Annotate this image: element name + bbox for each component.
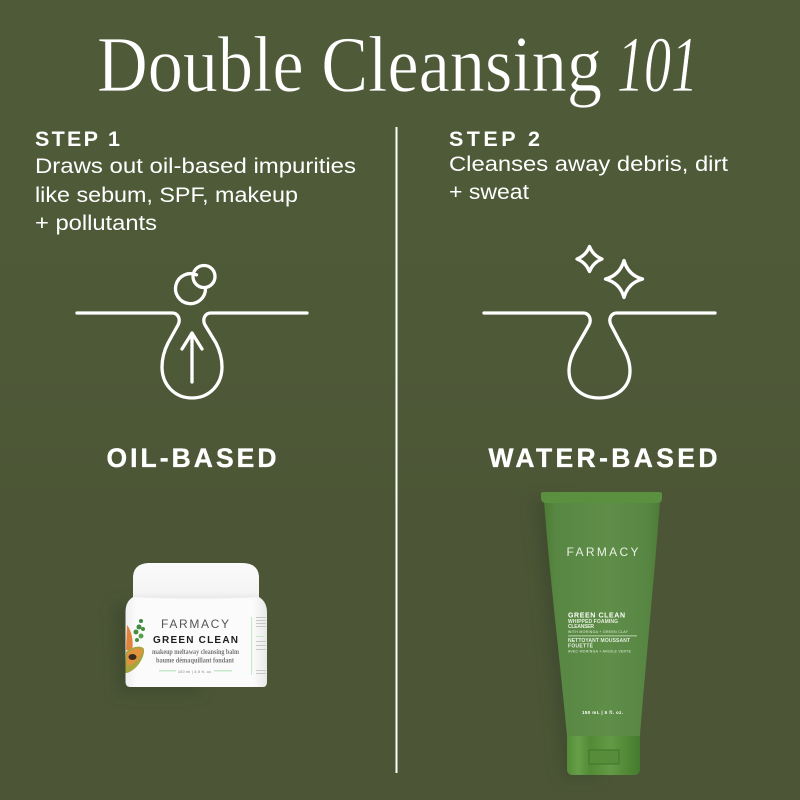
- icon: pore with oil bubbles and up arrow: [77, 266, 307, 398]
- tube cap: [567, 736, 640, 775]
- jar label text: FARMACY: [161, 617, 229, 631]
- panel: step 2 text: + sweat: [449, 180, 529, 204]
- product: whipped foaming cleanser tube: GREEN CLEAN: [568, 612, 625, 620]
- product: cleansing balm jar: [114, 563, 267, 694]
- product: whipped foaming cleanser tube: NETTOYANT MOUSSANT: [568, 638, 630, 644]
- product: cleansing balm jar: baume démaquillant fondant: [156, 656, 234, 664]
- title: 101: [617, 22, 698, 109]
- panel: step 2 text: Cleanses away debris, dirt: [449, 152, 728, 176]
- jar body: [126, 597, 267, 687]
- panel: step 1 text: + pollutants: [35, 211, 157, 235]
- panel: step 1 text: STEP 1: [35, 127, 120, 151]
- heading: water-based: WATER-BASED: [488, 443, 718, 473]
- center divider: [396, 127, 398, 773]
- title: Double Cleansing: [97, 22, 602, 109]
- product: cleansing balm jar: GREEN CLEAN: [153, 635, 238, 646]
- panel: step 1 text: like sebum, SPF, makeup: [35, 183, 298, 207]
- panel: step 1 text: Draws out oil-based impurities: [35, 154, 356, 178]
- product: whipped foaming cleanser tube: WITH MORINGA + GREEN CLAY: [568, 630, 629, 634]
- panel: step 1 text: [35, 127, 356, 235]
- icon: clean pore with sparkles: [484, 246, 715, 398]
- panel: step 2 text: [449, 127, 728, 204]
- panel: step 2 text: STEP 2: [449, 127, 540, 151]
- tube crimp: [541, 492, 662, 503]
- product: cleansing balm jar: makeup meltaway cleansing balm: [152, 647, 240, 656]
- product: whipped foaming cleanser tube: CLEANSER: [568, 624, 594, 630]
- product: cleansing balm jar: 100 ml | 4.5 fl. oz.: [178, 670, 212, 674]
- jar lid: [133, 563, 259, 600]
- tube body: [544, 500, 660, 736]
- product: whipped foaming cleanser tube: 150 mL | 5 fl. oz.: [582, 710, 623, 715]
- product: whipped foaming cleanser tube: [533, 492, 662, 778]
- jar illustration: papaya and moringa: [125, 619, 145, 673]
- tube label text: FARMACY: [566, 545, 638, 559]
- product: whipped foaming cleanser tube: FOUETTÉ: [568, 642, 594, 650]
- heading: oil-based: OIL-BASED: [106, 443, 276, 473]
- product: whipped foaming cleanser tube: WHIPPED FOAMING: [568, 619, 618, 625]
- product: whipped foaming cleanser tube: AVEC MORINGA + ARGILE VERTE: [568, 650, 632, 654]
